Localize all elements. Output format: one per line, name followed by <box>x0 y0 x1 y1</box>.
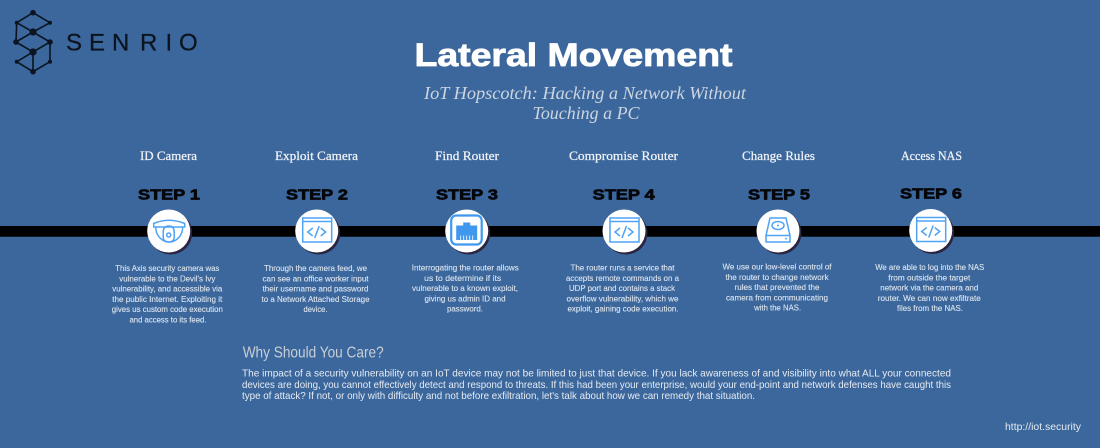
icon: code window <box>295 210 340 254</box>
panel: step 3: us to determine if its <box>424 273 501 283</box>
panel: step 1 <box>112 148 223 324</box>
panel: step 5: camera from communicating <box>726 292 828 302</box>
panel: step 2: device. <box>304 304 328 314</box>
panel: step 3 <box>412 148 519 314</box>
panel: step 3: giving us admin ID and <box>424 293 506 303</box>
text block: why should you care <box>242 368 951 402</box>
panel: step 4: overflow vulnerability, which we <box>566 293 679 303</box>
panel: step 4 <box>566 148 679 314</box>
panel: step 4: UDP port and contains a stack <box>569 283 676 293</box>
panel: step 1: STEP 1 <box>138 186 200 204</box>
subtitle <box>423 83 747 123</box>
logo: Senrio <box>13 10 198 74</box>
panel: step 5: STEP 5 <box>748 186 810 204</box>
panel: step 4: The router runs a service that <box>570 262 675 272</box>
panel: step 6: STEP 6 <box>900 186 962 202</box>
panel: step 2: STEP 2 <box>286 186 348 204</box>
panel: step 4: STEP 4 <box>593 186 655 204</box>
panel: step 5: We use our low-level control of <box>722 262 832 272</box>
icon: security camera <box>147 210 192 254</box>
panel: step 3: Find Router <box>435 148 500 163</box>
icon: code window <box>909 209 954 254</box>
panel: step 1: and access to its feed. <box>130 314 206 324</box>
panel: step 4: Compromise Router <box>569 148 679 163</box>
logo: Senrio: SENRIO <box>66 30 198 57</box>
panel: step 2: Through the camera feed, we <box>264 263 367 273</box>
title: Lateral Movement <box>414 37 733 73</box>
panel: step 1: gives us custom code execution <box>112 304 223 314</box>
panel: step 6: files from the NAS. <box>897 303 963 313</box>
panel: step 1: the public Internet. Exploiting it <box>112 294 223 304</box>
panel: step 5: rules that prevented the <box>734 282 820 292</box>
panel: step 4: accepts remote commands on a <box>566 273 679 283</box>
panel: step 5: with the NAS. <box>753 303 801 313</box>
panel: step 2: their username and password <box>262 284 369 294</box>
panel: step 1: vulnerability, and accessible via <box>112 284 222 294</box>
panel: step 5 <box>722 148 832 313</box>
panel: step 2: to a Network Attached Storage <box>262 294 370 304</box>
icon: router port <box>445 210 490 254</box>
text block: why should you care: devices are doing, you cannot effectively detect and respond to threats. If this had been your enterprise, would your end-point and network defenses have caught this <box>242 379 951 391</box>
subtitle: IoT Hopscotch: Hacking a Network Without <box>423 83 747 103</box>
panel: step 6 <box>875 148 984 313</box>
panel: step 6: from outside the target <box>888 272 971 282</box>
icon: hard drive <box>756 210 802 254</box>
panel: step 1: vulnerable to the Devil's Ivy <box>119 273 216 283</box>
panel: step 4: exploit, gaining code execution. <box>568 304 678 314</box>
timeline bar <box>0 226 1100 237</box>
text block: why should you care: type of attack? If not, or only with difficulty and not before exfiltration, let's talk about how we can remedy that situation. <box>242 390 755 402</box>
panel: step 2 <box>262 148 370 314</box>
icon: code window <box>602 210 648 254</box>
panel: step 2: can see an office worker input <box>262 273 369 283</box>
text block: why should you care: The impact of a security vulnerability on an IoT device may not be limited to just that device. If you lack awareness of and visibility into what ALL your connected <box>242 368 951 380</box>
panel: step 3: STEP 3 <box>436 186 498 204</box>
panel: step 2: Exploit Camera <box>275 148 358 163</box>
panel: step 5: the router to change network <box>726 272 829 282</box>
panel: step 3: password. <box>447 304 483 314</box>
panel: step 3: vulnerable to a known exploit, <box>412 283 518 293</box>
panel: step 5: Change Rules <box>742 148 815 163</box>
subtitle: Touching a PC <box>532 103 640 123</box>
panel: step 6: Access NAS <box>901 148 962 163</box>
panel: step 1: This Axis security camera was <box>115 263 219 273</box>
panel: step 6: network via the camera and <box>880 283 978 293</box>
heading: why should you care: Why Should You Care? <box>243 344 384 362</box>
url: http://iot.security <box>1005 422 1081 433</box>
panel: step 6: We are able to log into the NAS <box>875 262 984 272</box>
panel: step 1: ID Camera <box>140 148 197 163</box>
panel: step 6: router. We can now exfiltrate <box>878 293 981 303</box>
panel: step 3: Interrogating the router allows <box>412 262 519 272</box>
